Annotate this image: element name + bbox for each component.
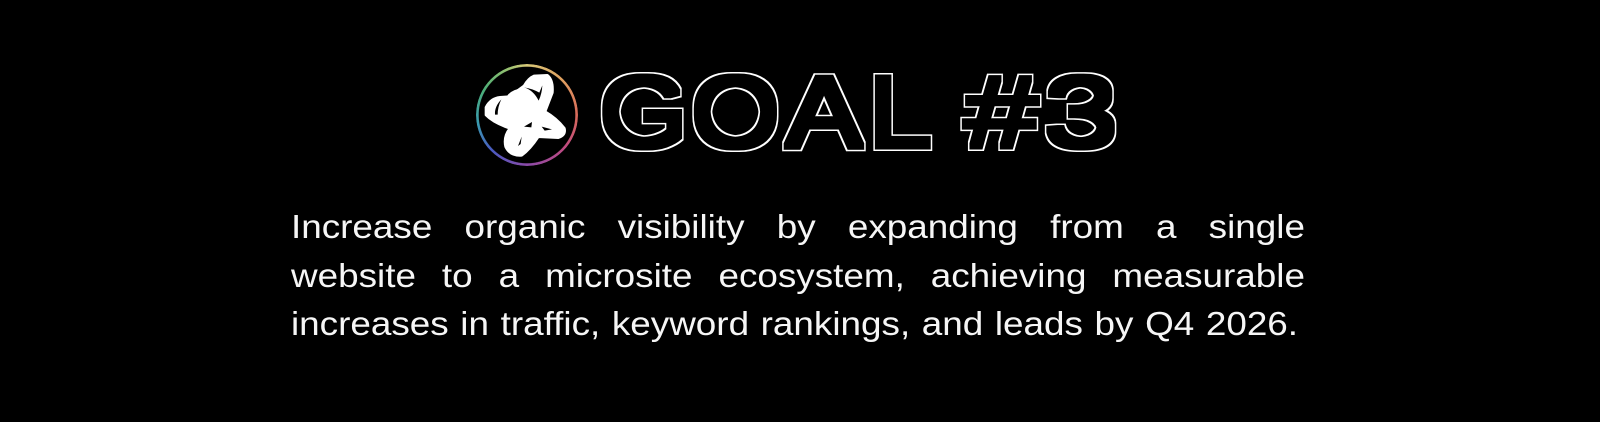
body text: goal description: increases in traffic, keyword rankings, and leads by Q4 2026. bbox=[291, 306, 1298, 343]
body text: goal description: Increase organic visibility by expanding from a single bbox=[291, 209, 1305, 246]
body text: goal description: website to a microsite ecosystem, achieving measurable bbox=[291, 258, 1305, 295]
icon glyph: white knot bbox=[484, 74, 566, 157]
icon ring: rainbow gradient circle bbox=[476, 64, 578, 166]
body text: goal description bbox=[291, 209, 1305, 343]
title: GOAL #3 outlined: GOAL bbox=[600, 56, 931, 168]
icon: goal emblem bbox=[476, 64, 578, 166]
title: GOAL #3 outlined: #3 bbox=[964, 56, 1118, 168]
title: GOAL #3 outlined bbox=[600, 56, 1118, 168]
